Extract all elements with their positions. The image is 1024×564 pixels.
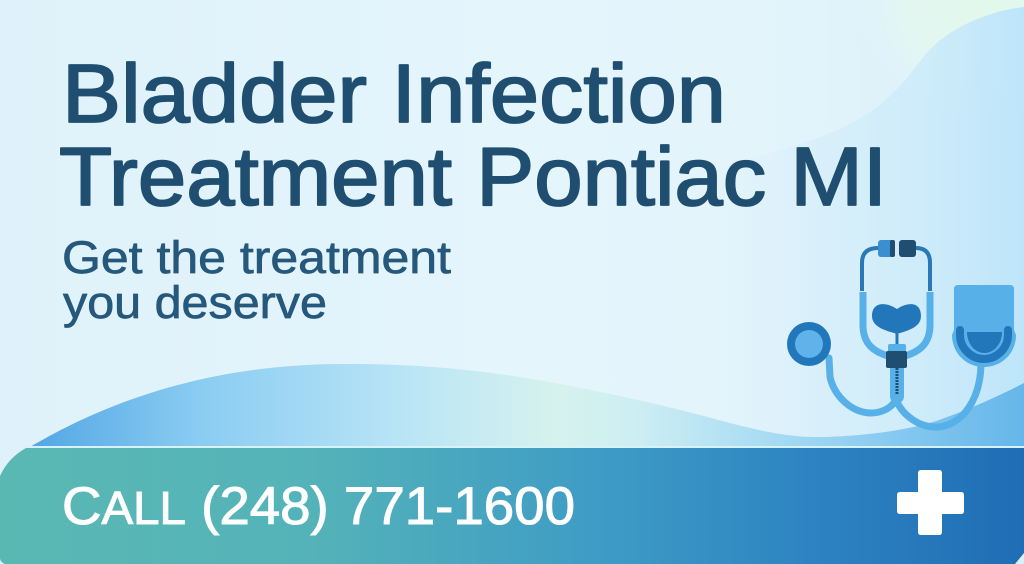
tubing	[829, 358, 896, 413]
call bar	[0, 446, 1024, 564]
icon: stethoscope	[787, 240, 1016, 427]
bottom wave hill	[30, 364, 1024, 447]
connector	[888, 344, 906, 354]
headset lower arms	[863, 292, 930, 356]
blue cuff	[952, 285, 1016, 367]
top right wave	[700, 7, 1024, 450]
subtitle: Get the treatment	[62, 232, 452, 283]
subtitle	[62, 232, 452, 328]
top right pale green glow	[850, 0, 1024, 130]
phone number: CALL (248) 771-1600	[62, 477, 575, 536]
bladder shape	[872, 304, 921, 334]
ear tips	[878, 240, 895, 257]
subtitle: you deserve	[63, 277, 327, 328]
title: Treatment Pontiac MI	[59, 130, 887, 223]
title: Bladder Infection	[62, 47, 726, 140]
chest piece	[787, 322, 831, 366]
title	[59, 47, 887, 223]
icon: white plus	[897, 470, 964, 535]
headset upper arms	[862, 248, 930, 291]
